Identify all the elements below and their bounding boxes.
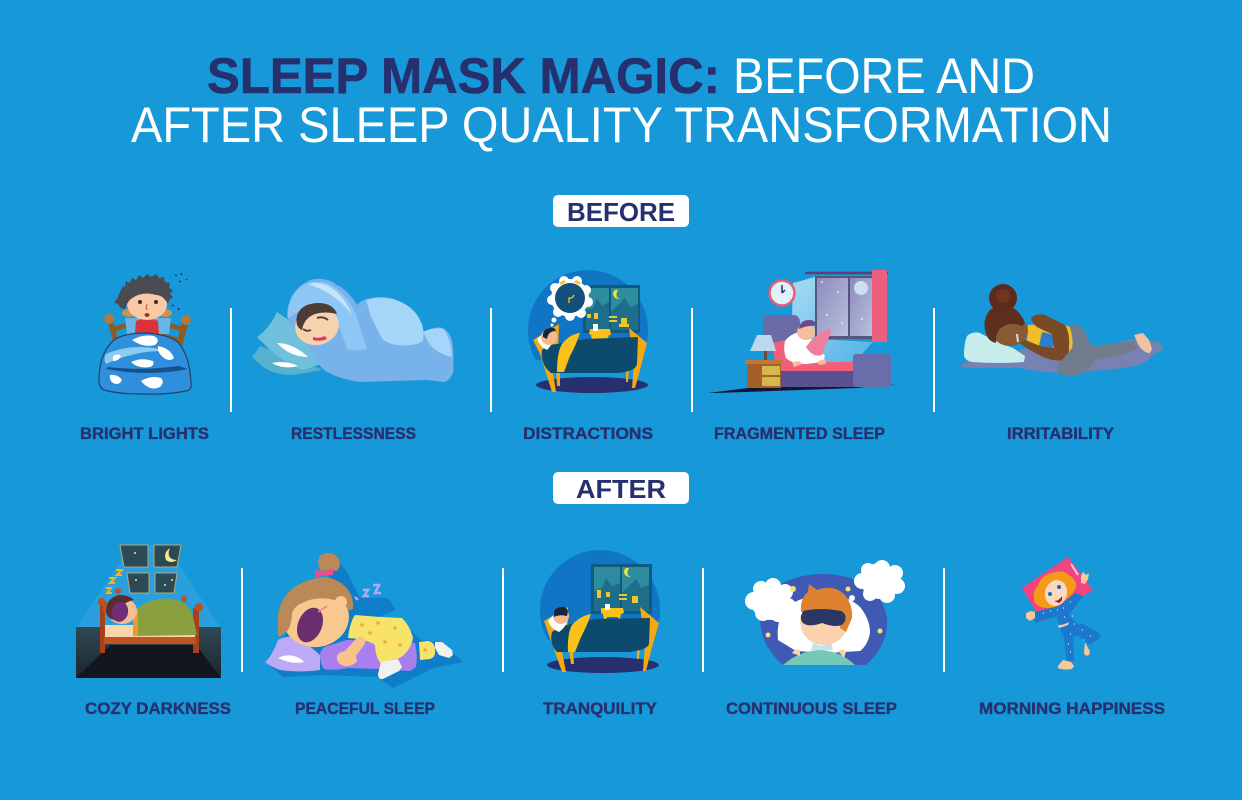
divider [241,568,243,672]
labels: before row: FRAGMENTED SLEEP [714,425,885,443]
icon: fragmented sleep [708,270,896,393]
icon: continuous sleep with mask [745,560,905,665]
labels: after row: PEACEFUL SLEEP [295,700,435,718]
icon: irritable woman on side [960,284,1163,376]
divider [490,308,492,412]
labels: after row [85,700,1165,718]
title: BEFORE AND [733,48,1035,104]
icon: tranquility [540,550,660,673]
title: AFTER SLEEP QUALITY TRANSFORMATION [131,97,1112,153]
divider [933,308,935,412]
divider [943,568,945,672]
heading: after [553,472,689,504]
icon: boy awake in bed [99,273,191,394]
labels: before row: DISTRACTIONS [523,425,653,443]
icon: distractions in bed [528,270,648,393]
labels: before row: IRRITABILITY [1007,425,1114,443]
labels: after row: TRANQUILITY [543,700,657,718]
icon: restless person under blanket [252,279,454,382]
labels: before row [80,425,1114,443]
divider [691,308,693,412]
divider [502,568,504,672]
heading: before: BEFORE [567,197,675,227]
labels: after row: COZY DARKNESS [85,700,231,718]
divider [230,308,232,412]
title [131,48,1112,153]
labels: before row: BRIGHT LIGHTS [80,425,209,443]
divider [702,568,704,672]
labels: before row: RESTLESSNESS [291,425,416,443]
icon: peaceful girl with mask [265,553,463,688]
labels: after row: CONTINUOUS SLEEP [726,700,897,718]
heading: after: AFTER [576,474,666,504]
icon: cozy darkness [76,545,221,678]
labels: after row: MORNING HAPPINESS [979,700,1165,718]
icon: happy child on pillow [1022,557,1101,670]
title: SLEEP MASK MAGIC: [207,48,720,104]
